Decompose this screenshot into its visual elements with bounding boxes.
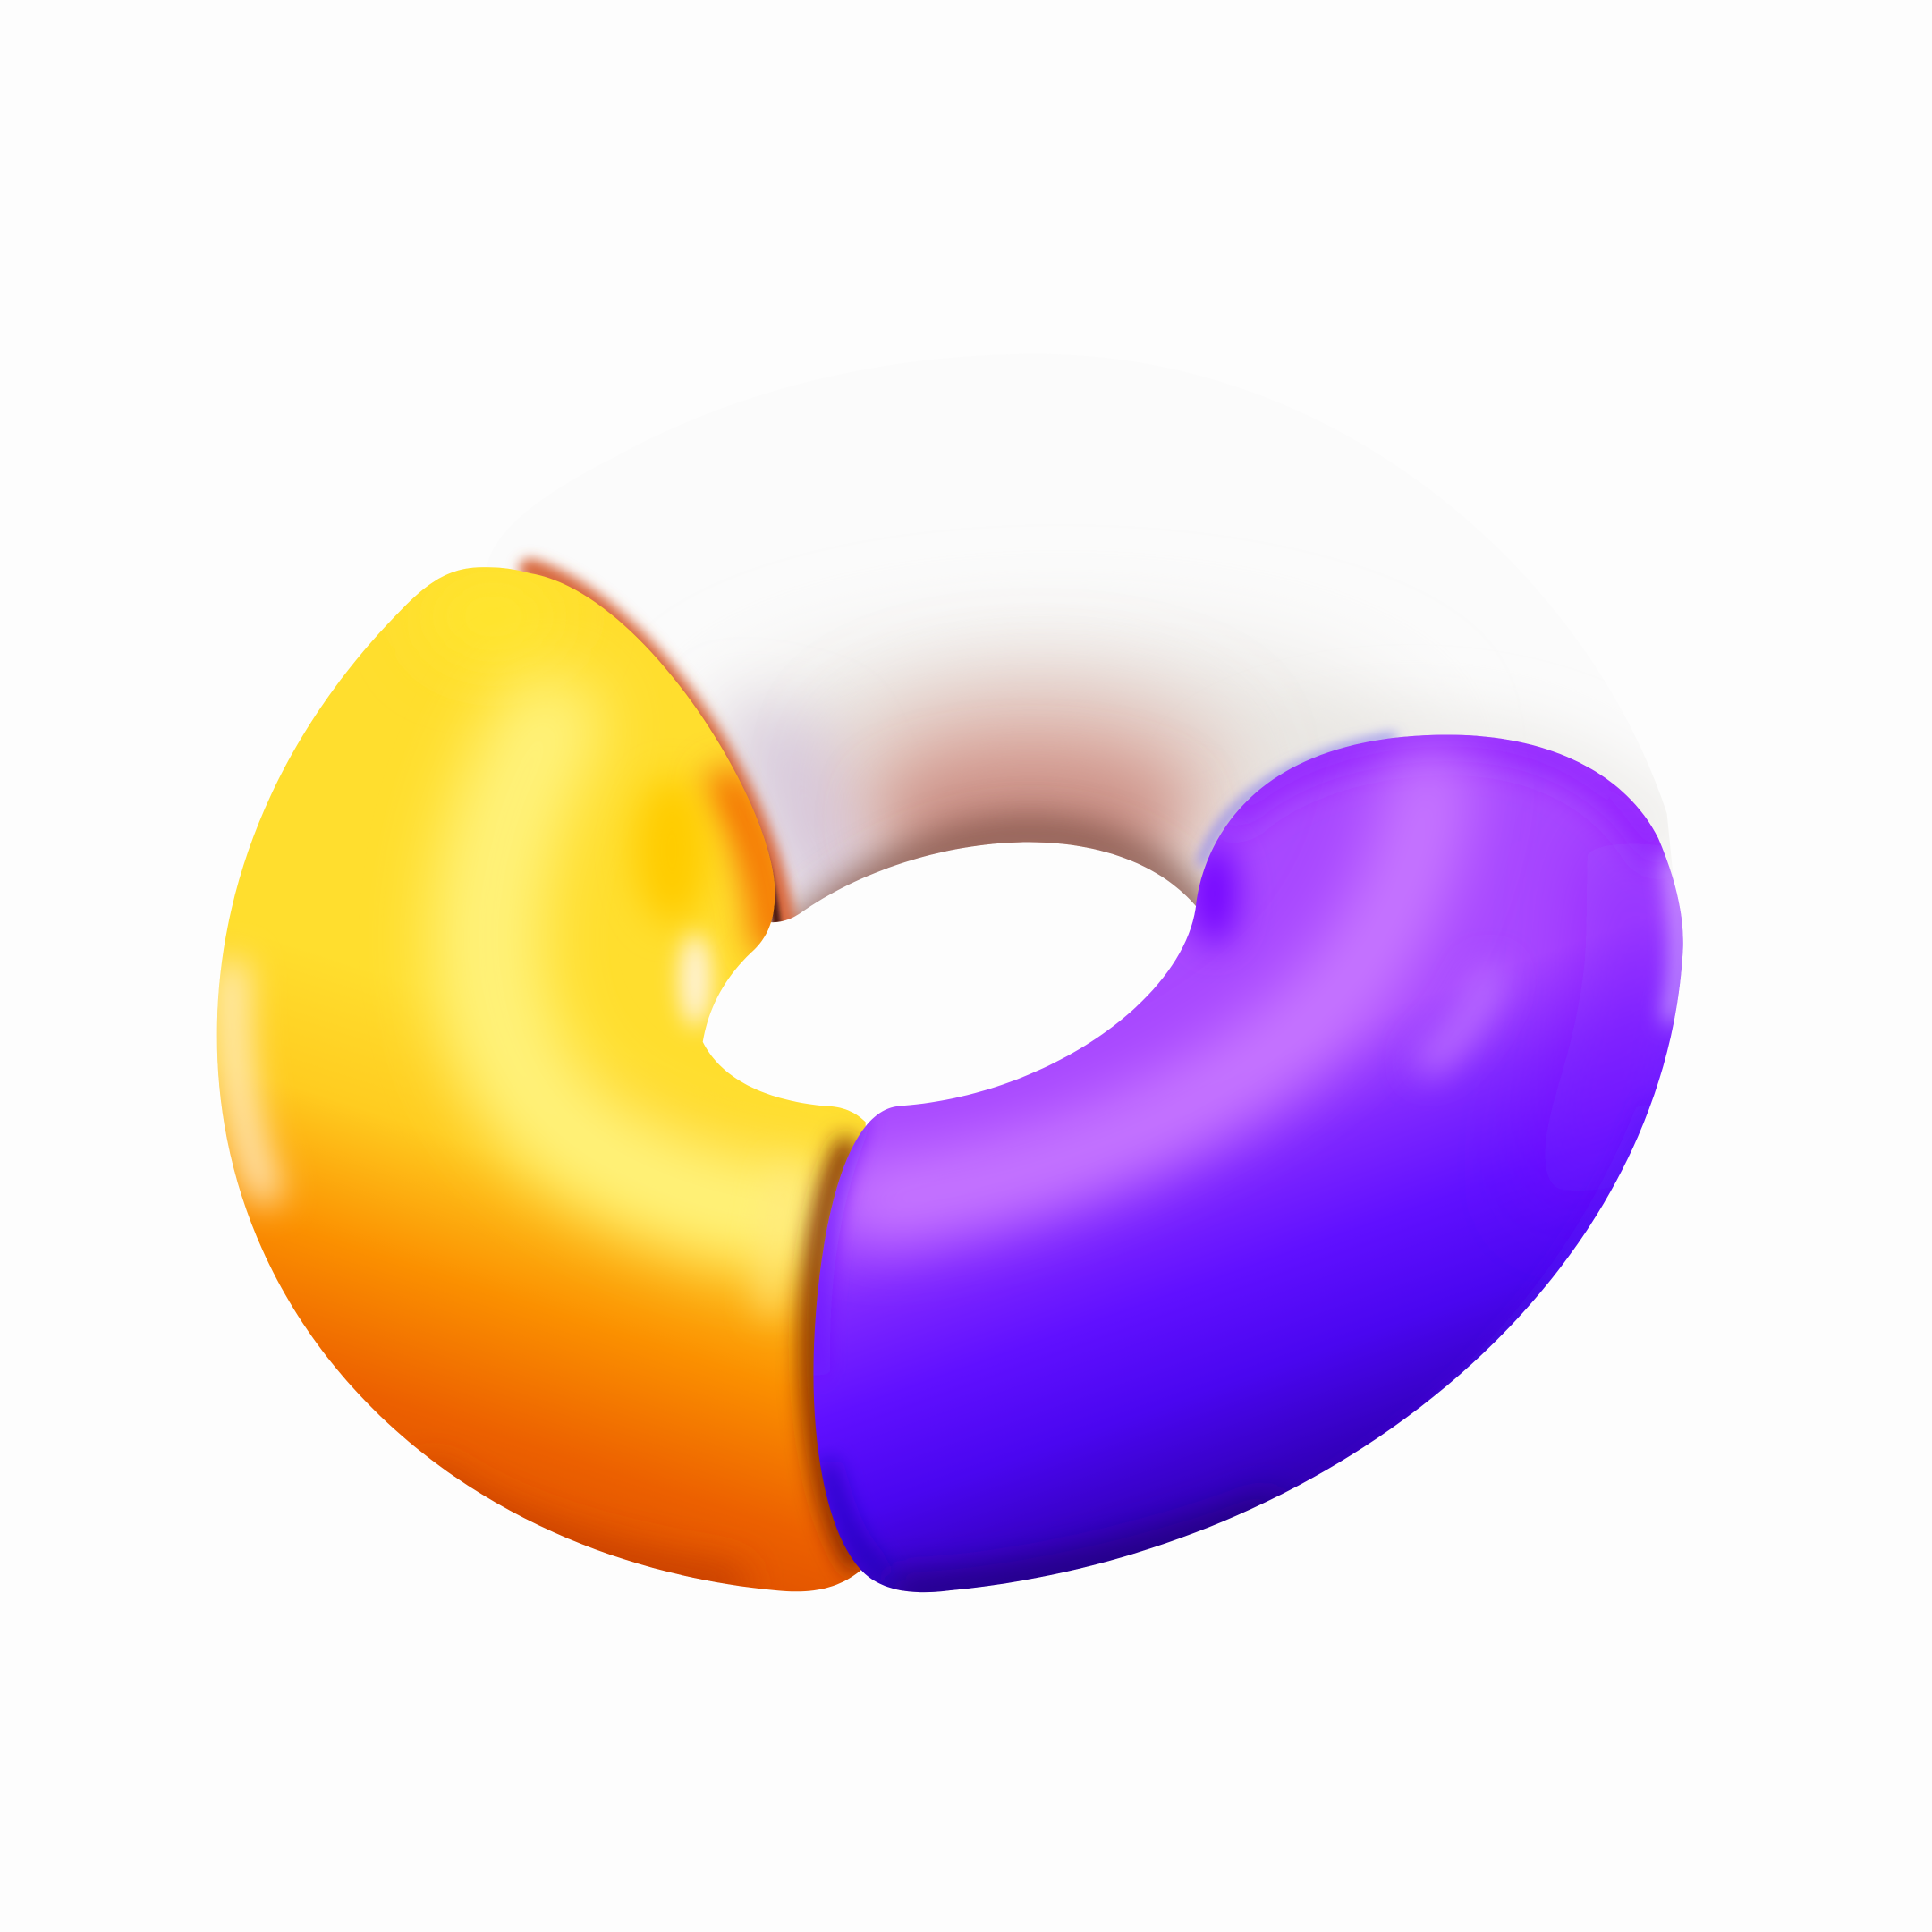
purple segment shading: highlight band — [876, 789, 1430, 1202]
purple segment shading: right violet — [1578, 863, 1637, 1172]
yellow segment shading: seam highlight — [771, 1172, 789, 1307]
yellow segment shading: right orange fold — [727, 789, 775, 937]
purple segment shading: deep violet corner — [1192, 842, 1237, 945]
white segment shading: brown inner shadow — [789, 836, 1202, 949]
yellow segment shading: bottom dark — [431, 1486, 727, 1584]
white segment shading: contact line — [764, 839, 784, 923]
white segment shading: blue fringe near purple — [1202, 737, 1394, 863]
yellow segment shading: highlight band — [487, 727, 801, 1215]
purple segment shading: right rim light — [1671, 863, 1680, 1017]
white segment shading: pink core — [882, 771, 1177, 869]
yellow segment shading: seam shadow — [812, 1140, 860, 1568]
purple segment shading: bottom left blue — [828, 1467, 882, 1572]
yellow segment shading: pale spot — [680, 933, 711, 1027]
donut chart — [216, 548, 1683, 1592]
purple segment shading: left rim — [816, 1122, 857, 1368]
white segment shading: pink glow — [857, 703, 1215, 876]
white segment shading: orange shadow from yellow — [530, 570, 786, 937]
yellow segment shading: top saturated — [401, 567, 563, 611]
purple segment shading: secondary highlight — [1430, 980, 1489, 1060]
white segment shading: lilac reflection — [727, 703, 887, 919]
yellow segment shading: deep yellow fold — [635, 776, 709, 925]
segment: white — [509, 548, 1671, 923]
purple segment shading: outer rim blue — [1307, 1110, 1652, 1504]
purple segment shading: bottom dark — [900, 1511, 1270, 1590]
yellow segment shading: left rim light — [232, 974, 265, 1190]
purple segment shading: top edge saturated — [1233, 740, 1658, 851]
segment: yellow — [216, 567, 866, 1592]
white segment shading: grey near purple — [1402, 712, 1670, 850]
segment: purple — [789, 715, 1701, 1615]
white segment shading: grey inner wall — [703, 641, 1418, 887]
